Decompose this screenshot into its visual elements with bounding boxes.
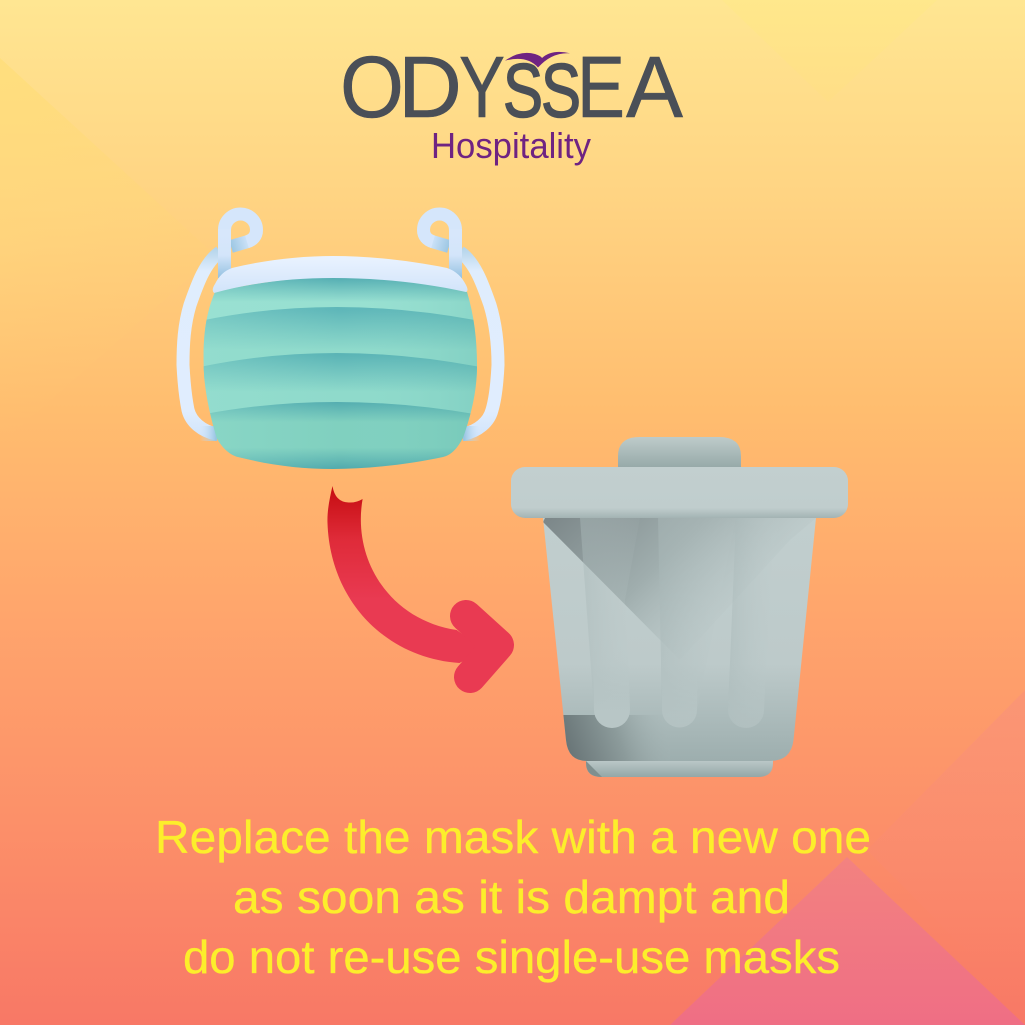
bin lid knob (618, 437, 741, 467)
caption line 1: Replace the mask with a new one (155, 811, 871, 863)
icon: surgical mask (183, 214, 498, 475)
bin foot (586, 758, 773, 777)
logo: Odyssea Hospitality (340, 39, 683, 166)
logo wordmark: A (626, 39, 683, 136)
caption line 2: as soon as it is dampt and (233, 871, 790, 923)
bin lid (511, 467, 848, 518)
logo wordmark: S (541, 49, 581, 134)
mask pleats (204, 278, 477, 469)
right loop (424, 214, 456, 278)
left loop (224, 214, 256, 278)
logo wordmark (340, 39, 683, 136)
bin grooves (580, 518, 756, 728)
logo wordmark: Y (459, 39, 505, 136)
strap shading (200, 426, 480, 441)
icon: trash bin (511, 437, 848, 777)
mask top band (213, 256, 468, 293)
logo wordmark: S (503, 49, 543, 134)
logo wordmark: E (577, 39, 625, 136)
logo wordmark: O (340, 39, 404, 136)
caption line 3: do not re-use single-use masks (183, 931, 840, 983)
right ear strap (460, 252, 498, 434)
logo subtitle: Hospitality (431, 125, 591, 166)
caption text (155, 811, 871, 983)
bin body (540, 515, 820, 765)
logo bird (505, 52, 570, 68)
logo wordmark: D (398, 39, 462, 136)
bin bottom shadow (563, 715, 643, 761)
arrow: curved red arrow into bin (327, 486, 498, 677)
left ear strap (183, 252, 220, 434)
